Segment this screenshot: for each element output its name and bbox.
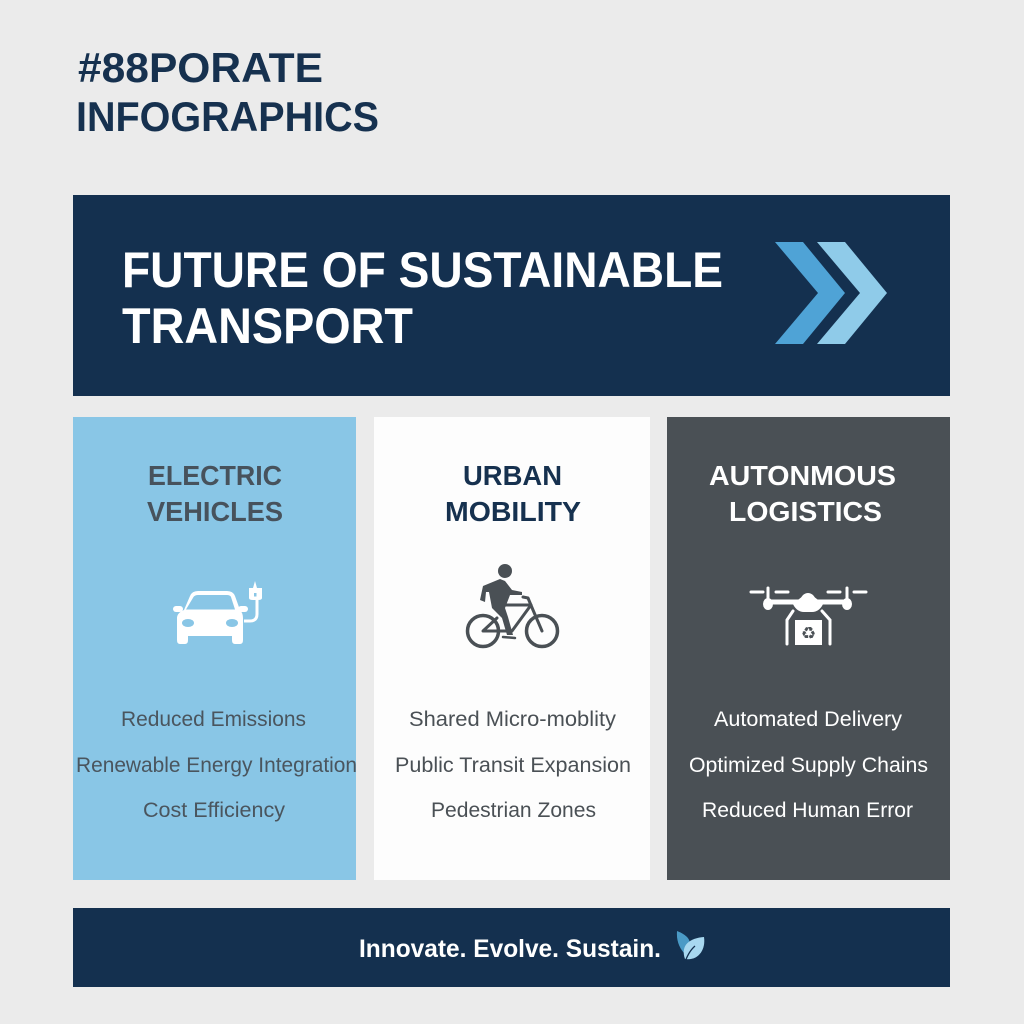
- heading: autonomous logistics: [709, 460, 896, 527]
- title banner: [73, 195, 950, 396]
- panel: electric vehicles: [73, 417, 357, 880]
- benefits list: Automated Delivery: [714, 708, 903, 731]
- benefits list: Reduced Emissions: [121, 708, 306, 731]
- brand heading: [76, 44, 379, 140]
- icon: leaves: [677, 931, 704, 965]
- heading: electric vehicles: ELECTRIC: [148, 460, 282, 491]
- benefits list: Renewable Energy Integration: [76, 754, 357, 777]
- benefits list: Optimized Supply Chains: [689, 754, 928, 777]
- benefits list: Shared Micro-moblity: [409, 708, 617, 731]
- heading: autonomous logistics: AUTONMOUS: [709, 460, 896, 491]
- banner title: FUTURE OF SUSTAINABLE: [122, 242, 723, 298]
- benefits list: Reduced Human Error: [702, 799, 913, 822]
- icon: delivery drone with recycling package: [751, 588, 866, 645]
- heading: electric vehicles: VEHICLES: [147, 496, 283, 527]
- icon: double chevron arrow: [775, 242, 887, 344]
- icon: cyclist: [468, 564, 558, 646]
- brand heading: #88PORATE: [78, 44, 323, 91]
- footer band: [73, 908, 950, 987]
- heading: electric vehicles: [147, 460, 283, 527]
- benefits list: Cost Efficiency: [143, 799, 286, 822]
- benefits list: Public Transit Expansion: [395, 754, 631, 777]
- heading: urban mobility: MOBILITY: [445, 496, 581, 527]
- icon: electric car with charging plug: [173, 581, 262, 644]
- benefits list: [689, 708, 928, 822]
- benefits list: [76, 708, 357, 822]
- panel: autonomous logistics: [667, 417, 950, 880]
- heading: urban mobility: URBAN: [463, 460, 562, 491]
- panel: urban mobility: [374, 417, 650, 880]
- tagline: Innovate. Evolve. Sustain.: [359, 935, 661, 963]
- banner title: TRANSPORT: [122, 298, 413, 354]
- banner title: [122, 242, 723, 354]
- benefits list: [395, 708, 631, 822]
- heading: urban mobility: [445, 460, 581, 527]
- heading: autonomous logistics: LOGISTICS: [729, 496, 882, 527]
- icon: recycling symbol: ♻: [801, 624, 816, 644]
- brand heading: INFOGRAPHICS: [76, 93, 379, 140]
- benefits list: Pedestrian Zones: [431, 799, 596, 822]
